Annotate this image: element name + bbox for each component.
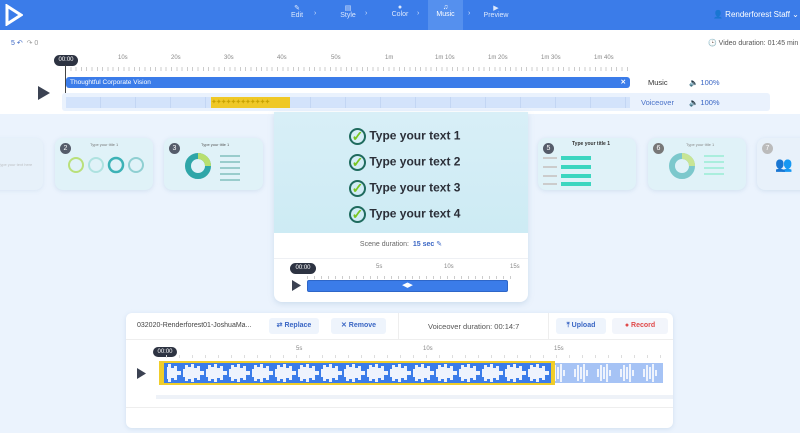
scene 6: 6 bbox=[657, 145, 660, 152]
tab: Music active: ♫ bbox=[443, 4, 448, 11]
waveform timeline bbox=[153, 347, 177, 357]
checklist: Type your text 1 bbox=[369, 129, 460, 143]
ruler: 20s bbox=[171, 55, 181, 61]
tab: Style: Style bbox=[340, 12, 356, 19]
waveform bbox=[159, 361, 663, 385]
selected scene card: 10s bbox=[444, 264, 454, 270]
scene duration: Scene duration: 15 sec ✎ bbox=[360, 241, 442, 248]
selected scene card bbox=[274, 112, 528, 302]
selected scene card: ◀▶ bbox=[402, 282, 413, 289]
scene 7: 👥 bbox=[775, 156, 792, 172]
tab: Preview: ▶ bbox=[493, 5, 499, 12]
timeline panel: Music bbox=[648, 78, 668, 87]
ruler: 10s bbox=[118, 55, 128, 61]
upload button: ⤒ Upload bbox=[567, 322, 595, 329]
scene 5: Type your title 1 bbox=[572, 141, 610, 147]
checklist: Type your text 3 bbox=[369, 181, 460, 195]
video duration: 🕒 Video duration: 01:45 min bbox=[708, 40, 798, 47]
checklist bbox=[349, 128, 460, 223]
selected scene card: 15s bbox=[510, 264, 520, 270]
scene 2 bbox=[55, 138, 153, 190]
scene 6: Type your title 1 bbox=[686, 142, 714, 147]
playhead bbox=[54, 55, 78, 66]
tab: Preview: Preview bbox=[484, 12, 508, 19]
replace button: ⇄ Replace bbox=[277, 322, 311, 329]
undo redo: 5 ↶ ↷ 0 bbox=[11, 40, 38, 47]
scene 1 bbox=[0, 138, 43, 190]
scene 3 bbox=[164, 138, 263, 190]
tab: Style bbox=[340, 5, 356, 19]
top navigation bar: › bbox=[365, 10, 367, 17]
tab: Color: Color bbox=[392, 11, 408, 18]
scene thumbnails bbox=[0, 138, 800, 192]
checklist: ✓ bbox=[352, 206, 363, 222]
voiceover editor panel bbox=[126, 313, 673, 428]
timeline panel bbox=[0, 30, 800, 114]
file name: 032020-Renderforest01-JoshuaMa... bbox=[137, 322, 251, 329]
ruler: 1m 40s bbox=[594, 55, 614, 61]
mini timeline: 00:00 bbox=[295, 265, 310, 271]
top navigation bar: › bbox=[468, 10, 470, 17]
scene preview bbox=[274, 112, 528, 233]
tab: Music active bbox=[428, 0, 463, 30]
scene 2: Type your title 1 bbox=[90, 142, 118, 147]
scene 5: 5 bbox=[547, 145, 550, 152]
tab: Edit bbox=[291, 5, 303, 19]
upload button bbox=[556, 318, 606, 334]
remove button bbox=[331, 318, 386, 334]
ruler bbox=[70, 54, 628, 71]
top navigation bar bbox=[0, 0, 800, 30]
top navigation bar: › bbox=[314, 10, 316, 17]
play button bbox=[38, 86, 50, 100]
ruler: 1m bbox=[385, 55, 393, 61]
checklist: Type your text 4 bbox=[369, 207, 460, 221]
scene 3: 3 bbox=[173, 145, 176, 152]
user menu: 👤 Renderforest Staff ⌄ bbox=[713, 10, 799, 19]
remove button: ✕ Remove bbox=[341, 322, 376, 329]
replace button bbox=[269, 318, 319, 334]
waveform timeline: 00:00 bbox=[157, 349, 172, 355]
logo bbox=[6, 4, 23, 26]
checklist: Type your text 2 bbox=[369, 155, 460, 169]
scene 6 bbox=[648, 138, 746, 190]
voiceover duration: Voiceover duration: 00:14:7 bbox=[428, 322, 519, 331]
tab: Color: ● bbox=[398, 4, 402, 11]
voiceover editor panel: 15s bbox=[554, 346, 564, 352]
timeline panel: 🔈 100% bbox=[689, 98, 720, 107]
music track: ✕ bbox=[621, 79, 626, 86]
selected scene card: 5s bbox=[376, 264, 382, 270]
checklist: ✓ bbox=[352, 128, 363, 144]
record button bbox=[612, 318, 668, 334]
ruler: 50s bbox=[331, 55, 341, 61]
voiceover editor panel: 10s bbox=[423, 346, 433, 352]
voiceover track bbox=[62, 93, 770, 111]
scene 3: Type your title 1 bbox=[201, 142, 229, 147]
checklist: ✓ bbox=[352, 154, 363, 170]
tab: Music active: Music bbox=[436, 11, 455, 18]
ruler: 1m 30s bbox=[541, 55, 561, 61]
ruler: 1m 10s bbox=[435, 55, 455, 61]
music track bbox=[66, 77, 630, 88]
ruler: 30s bbox=[224, 55, 234, 61]
tab: Edit: ✎ bbox=[294, 5, 300, 12]
tab: Style: ▤ bbox=[345, 5, 351, 12]
checklist: ✓ bbox=[352, 180, 363, 196]
record button: ● Record bbox=[625, 322, 655, 329]
voiceover editor panel: 5s bbox=[296, 346, 302, 352]
scene 7: 7 bbox=[766, 145, 769, 152]
ruler: 40s bbox=[277, 55, 287, 61]
timeline panel: Voiceover bbox=[641, 98, 674, 107]
mini timeline bbox=[290, 263, 316, 274]
timeline panel: ✦✦✦✦✦✦✦✦✦✦✦✦ bbox=[211, 99, 269, 106]
scene 7 bbox=[757, 138, 800, 190]
music track: Thoughtful Corporate Vision bbox=[70, 79, 151, 86]
tab: Preview bbox=[484, 5, 508, 19]
ruler: 1m 20s bbox=[488, 55, 508, 61]
playhead: 00:00 bbox=[58, 57, 74, 63]
scene 5 bbox=[538, 138, 636, 190]
tab: Color bbox=[392, 4, 408, 18]
top navigation bar: › bbox=[417, 10, 419, 17]
scene 2: 2 bbox=[64, 145, 67, 152]
timeline panel: 🔈 100% bbox=[689, 78, 720, 87]
tab: Edit: Edit bbox=[291, 12, 303, 19]
